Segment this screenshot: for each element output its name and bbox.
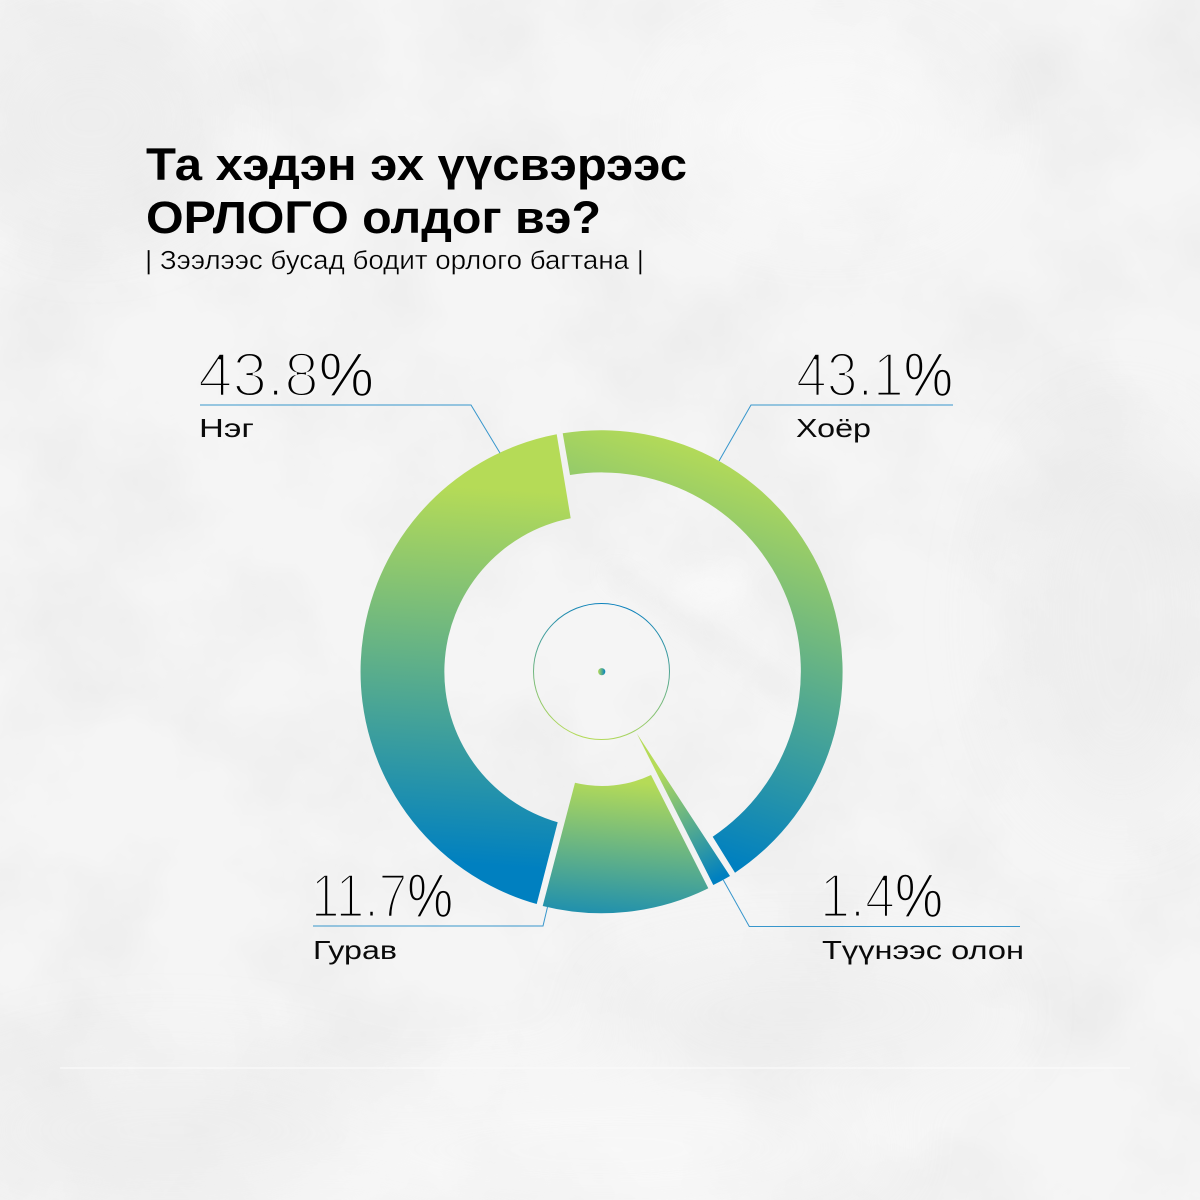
value: 43.8% <box>198 341 374 410</box>
subtitle: | Зээлээс бусад бодит орлого багтана | <box>145 247 644 275</box>
title: ОРЛОГО олдог вэ? <box>146 192 601 243</box>
value: 1.4% <box>820 862 943 931</box>
callout: Түүнээс олон 1.4% <box>723 862 1024 965</box>
callout: Нэг 43.8% <box>198 341 500 453</box>
label: Нэг <box>199 413 254 443</box>
label: Хоёр <box>796 413 871 443</box>
callout: Гурав 11.7% <box>311 862 548 965</box>
center ring <box>534 604 670 740</box>
callout: Хоёр 43.1% <box>719 341 953 461</box>
segment: Гурав 11.7% <box>543 775 708 913</box>
leader line <box>723 880 1020 926</box>
segment: Нэг 43.8% <box>361 434 571 904</box>
donut chart <box>361 430 843 913</box>
label: Гурав <box>313 935 397 965</box>
title: Та хэдэн эх үүсвэрээс <box>146 139 687 190</box>
leader line <box>719 405 953 461</box>
leader line <box>313 907 548 926</box>
value: 11.7% <box>311 862 453 931</box>
label: Түүнээс олон <box>822 935 1024 965</box>
segment: Түүнээс олон 1.4% <box>637 733 730 885</box>
leader line <box>200 405 500 453</box>
value: 43.1% <box>796 341 953 410</box>
segment: Хоёр 43.1% <box>563 430 843 873</box>
center dot <box>598 668 605 675</box>
